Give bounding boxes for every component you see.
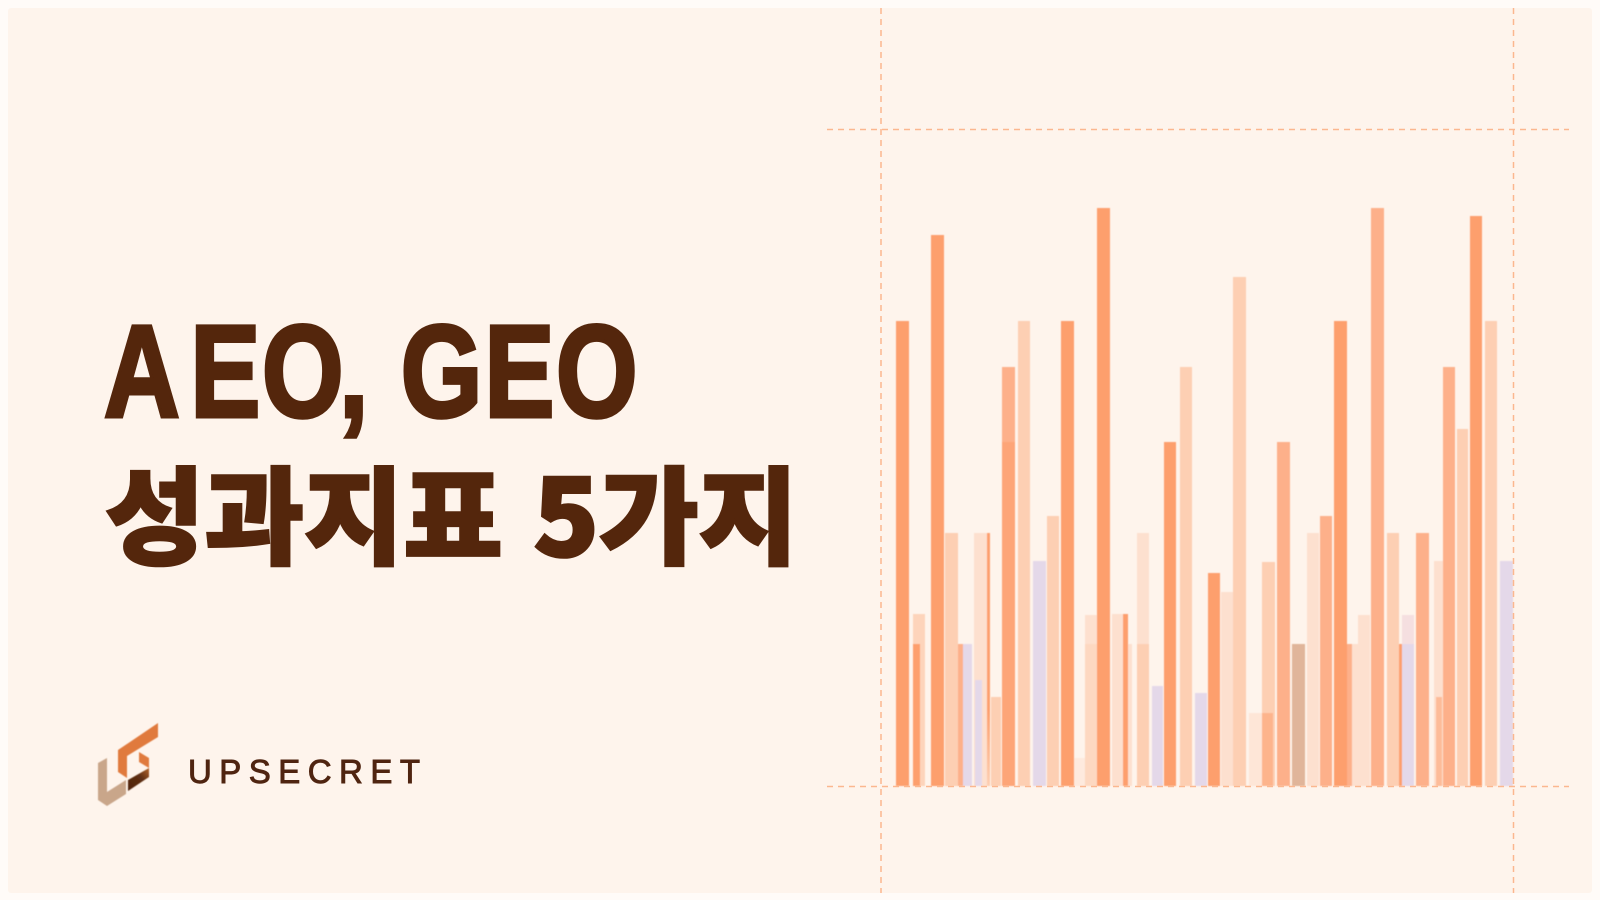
bar chart [896,208,1513,786]
logo: UPSECRET [98,723,420,806]
lavender bars [963,561,1513,786]
title line 2: 성과지표 5가지 [105,433,798,587]
strong orange bars [896,208,1482,786]
tan bar [1292,644,1305,786]
pink bar segment [1402,615,1414,644]
title [104,299,798,587]
logo wordmark: UPSECRET [188,753,420,790]
very light orange bars [974,533,1443,786]
title line 1: AEO, GEO [104,299,638,445]
dashed guide lines [827,8,1569,893]
overlay tints [1262,697,1442,786]
medium orange bars [958,208,1455,786]
light orange bars [913,277,1497,786]
logo mark [98,723,158,806]
